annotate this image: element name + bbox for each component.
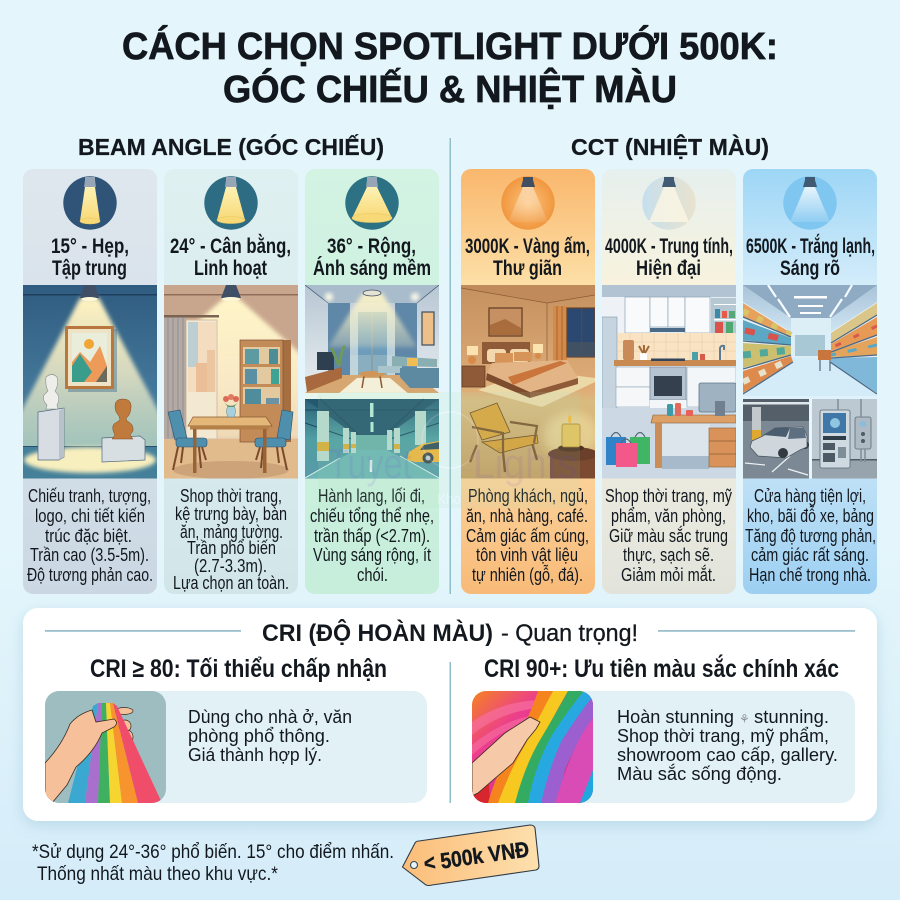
CRI 90 text: Shop thời trang, mỹ phẩm, (617, 725, 829, 746)
usage text: 15 degree: logo, chi tiết kiến (35, 506, 145, 526)
CRI 80 text: Dùng cho nhà ở, văn (188, 706, 352, 727)
usage text: 6500K: Hạn chế trong nhà. (749, 565, 871, 585)
panel: 36 degree beam (305, 169, 439, 594)
footnote: *Sử dụng 24°-36° phổ biến. 15° cho điểm nhấn. (32, 841, 394, 863)
CRI heading (262, 619, 638, 647)
bronze bust on pedestal (102, 399, 145, 462)
label: 6500K: Sáng rõ (780, 257, 840, 280)
title (122, 24, 778, 111)
desk with items (651, 401, 736, 469)
label: 15 degree (51, 235, 129, 280)
title: CÁCH CHỌN SPOTLIGHT DƯỚI 500K: (122, 24, 778, 68)
usage text: 15 degree: trúc đặc biệt. (45, 526, 132, 546)
label: 6500K (746, 234, 875, 280)
usage text: 15 degree: Chiếu tranh, tượng, (28, 486, 151, 506)
CRI 90 text (617, 706, 838, 784)
CRI 80 text: Giá thành hợp lý. (188, 744, 322, 765)
label: 24 degree: Linh hoạt (194, 257, 267, 280)
usage text: 36 degree (310, 486, 434, 585)
panel: 6500K cool (743, 169, 877, 594)
icon: neutral light (642, 176, 696, 230)
illustration: parking garage (305, 399, 439, 479)
usage text: 3000K: ăn, nhà hàng, café. (466, 506, 588, 526)
footnote (32, 841, 394, 885)
CRI 90 text: ⚘ (739, 712, 750, 726)
label: 4000K: 4000K - Trung tính, (605, 235, 733, 258)
usage text: 4000K: Giữ màu sắc trung (609, 525, 728, 546)
usage text: 3000K: Phòng khách, ngủ, (468, 486, 588, 506)
illustration: hand holding fabric strips (45, 691, 166, 803)
watermark: Kho (437, 491, 461, 508)
footnote: Thống nhất màu theo khu vực.* (37, 863, 278, 885)
label: 4000K (605, 235, 733, 280)
armchair (470, 403, 538, 472)
illustration: supermarket aisle (743, 285, 877, 399)
icon: narrow beam (63, 176, 117, 230)
usage text: 6500K: cảm giác rất sáng. (751, 545, 869, 565)
bed (462, 342, 595, 407)
curtain and window (164, 315, 219, 439)
illustration: bedroom and armchair (461, 285, 600, 479)
usage text: 3000K: tôn vinh vật liệu (476, 545, 578, 565)
usage text: 36 degree: chói. (357, 565, 388, 585)
usage text: 36 degree: Vùng sáng rộng, ít (313, 545, 431, 565)
CRI heading: - Quan trọng! (501, 620, 638, 647)
watermark: Tuyet (328, 440, 412, 487)
panel: CRI (23, 608, 877, 821)
label: 36 degree: Ánh sáng mềm (313, 257, 431, 280)
label: 3000K: 3000K - Vàng ấm, (465, 235, 590, 258)
icon: cool light (783, 176, 837, 230)
usage text: 15 degree: Độ tương phản cao. (27, 565, 153, 585)
white bust on pedestal (38, 374, 64, 460)
usage text: 24 degree: kệ trưng bày, bàn (175, 504, 287, 524)
usage text: 15 degree (27, 486, 153, 585)
illustration: kitchen and office desk (602, 285, 736, 479)
usage text: 36 degree: trần thấp (<2.7m). (314, 526, 430, 546)
icon: medium beam (204, 176, 258, 230)
CRI 90 text: stunning. (754, 706, 829, 727)
CRI 80 text (188, 706, 352, 765)
usage text: 3000K: Cảm giác ấm cúng, (466, 526, 589, 546)
usage text: 24 degree: (2.7-3.3m). (194, 556, 267, 576)
usage text: 6500K (745, 486, 876, 585)
usage text: 24 degree: Trần phổ biến (187, 538, 276, 558)
CRI 90 text: Màu sắc sống động. (617, 763, 782, 784)
panel: 24 degree beam (164, 169, 298, 594)
label: 24 degree (170, 234, 291, 280)
label: 3000K (465, 235, 590, 280)
watermark: Lights (473, 440, 577, 487)
CRI 90 text: Hoàn stunning (617, 706, 734, 727)
usage text: 24 degree: Shop thời trang, (180, 486, 282, 506)
panel: 4000K neutral (602, 169, 736, 594)
usage text: 4000K (605, 486, 732, 585)
wall painting (65, 326, 117, 392)
usage text: 15 degree: Trần cao (3.5-5m). (30, 545, 149, 565)
usage text: 3000K: tự nhiên (gỗ, đá). (472, 564, 583, 585)
panel: 3000K warm (461, 169, 600, 594)
usage text: 4000K: thực, sạch sẽ. (623, 545, 714, 565)
illustration: dining room with shelf (164, 285, 298, 478)
label: 24 degree: 24° - Cân bằng, (170, 234, 291, 258)
price tag: < 500k VNĐ (422, 836, 531, 876)
sub-panel: CRI 90 (472, 691, 855, 803)
watermark (318, 392, 580, 508)
usage text: 24 degree: Lựa chọn an toàn. (173, 573, 289, 593)
usage text: 36 degree: chiếu tổng thể nhẹ, (310, 506, 434, 526)
CRI 90 text: showroom cao cấp, gallery. (617, 744, 838, 765)
illustration: control panel (809, 399, 877, 479)
illustration: hand holding vivid fabric (472, 691, 593, 803)
CRI 80 heading: CRI ≥ 80: Tối thiểu chấp nhận (90, 655, 387, 683)
panel: 15 degree beam (23, 169, 157, 594)
usage text: 24 degree: ăn, mảng tường. (180, 522, 283, 542)
heading: beam angle: BEAM ANGLE (GÓC CHIẾU) (78, 133, 384, 160)
label: 4000K: Hiện đại (636, 257, 701, 280)
label: 36 degree (313, 235, 431, 280)
icon: warm light (501, 176, 555, 230)
heading: CCT: CCT (NHIỆT MÀU) (571, 133, 769, 160)
label: 15 degree: 15° - Hẹp, (51, 235, 129, 258)
usage text: 4000K: Giảm mỏi mắt. (621, 564, 716, 585)
label: 15 degree: Tập trung (52, 257, 127, 280)
label: 3000K: Thư giãn (493, 257, 562, 280)
title: GÓC CHIẾU & NHIỆT MÀU (223, 67, 677, 111)
usage text: 24 degree (173, 486, 289, 593)
icon: wide beam (345, 176, 399, 230)
usage text: 4000K: Shop thời trang, mỹ (605, 486, 732, 506)
illustration: gallery with artwork (23, 285, 157, 478)
bookcase (240, 340, 291, 442)
usage text: 36 degree: Hành lang, lối đi, (318, 486, 425, 506)
usage text: 6500K: Cửa hàng tiện lợi, (754, 486, 866, 506)
label: 36 degree: 36° - Rộng, (327, 235, 416, 258)
CRI 90 heading: CRI 90+: Ưu tiên màu sắc chính xác (484, 653, 839, 683)
illustration: parking lot car (743, 399, 809, 479)
CRI 80 text: phòng phổ thông. (188, 725, 330, 746)
candle on side table (544, 412, 600, 479)
CRI heading: CRI (ĐỘ HOÀN MÀU) (262, 619, 493, 647)
dining table and chairs (168, 394, 293, 473)
price tag (402, 825, 539, 886)
usage text: 3000K (466, 486, 589, 585)
usage text: 4000K: phẩm, văn phòng, (611, 506, 726, 526)
illustration: living room (305, 285, 439, 399)
shopping bags (606, 432, 650, 467)
sub-panel: CRI 80 (45, 691, 427, 803)
